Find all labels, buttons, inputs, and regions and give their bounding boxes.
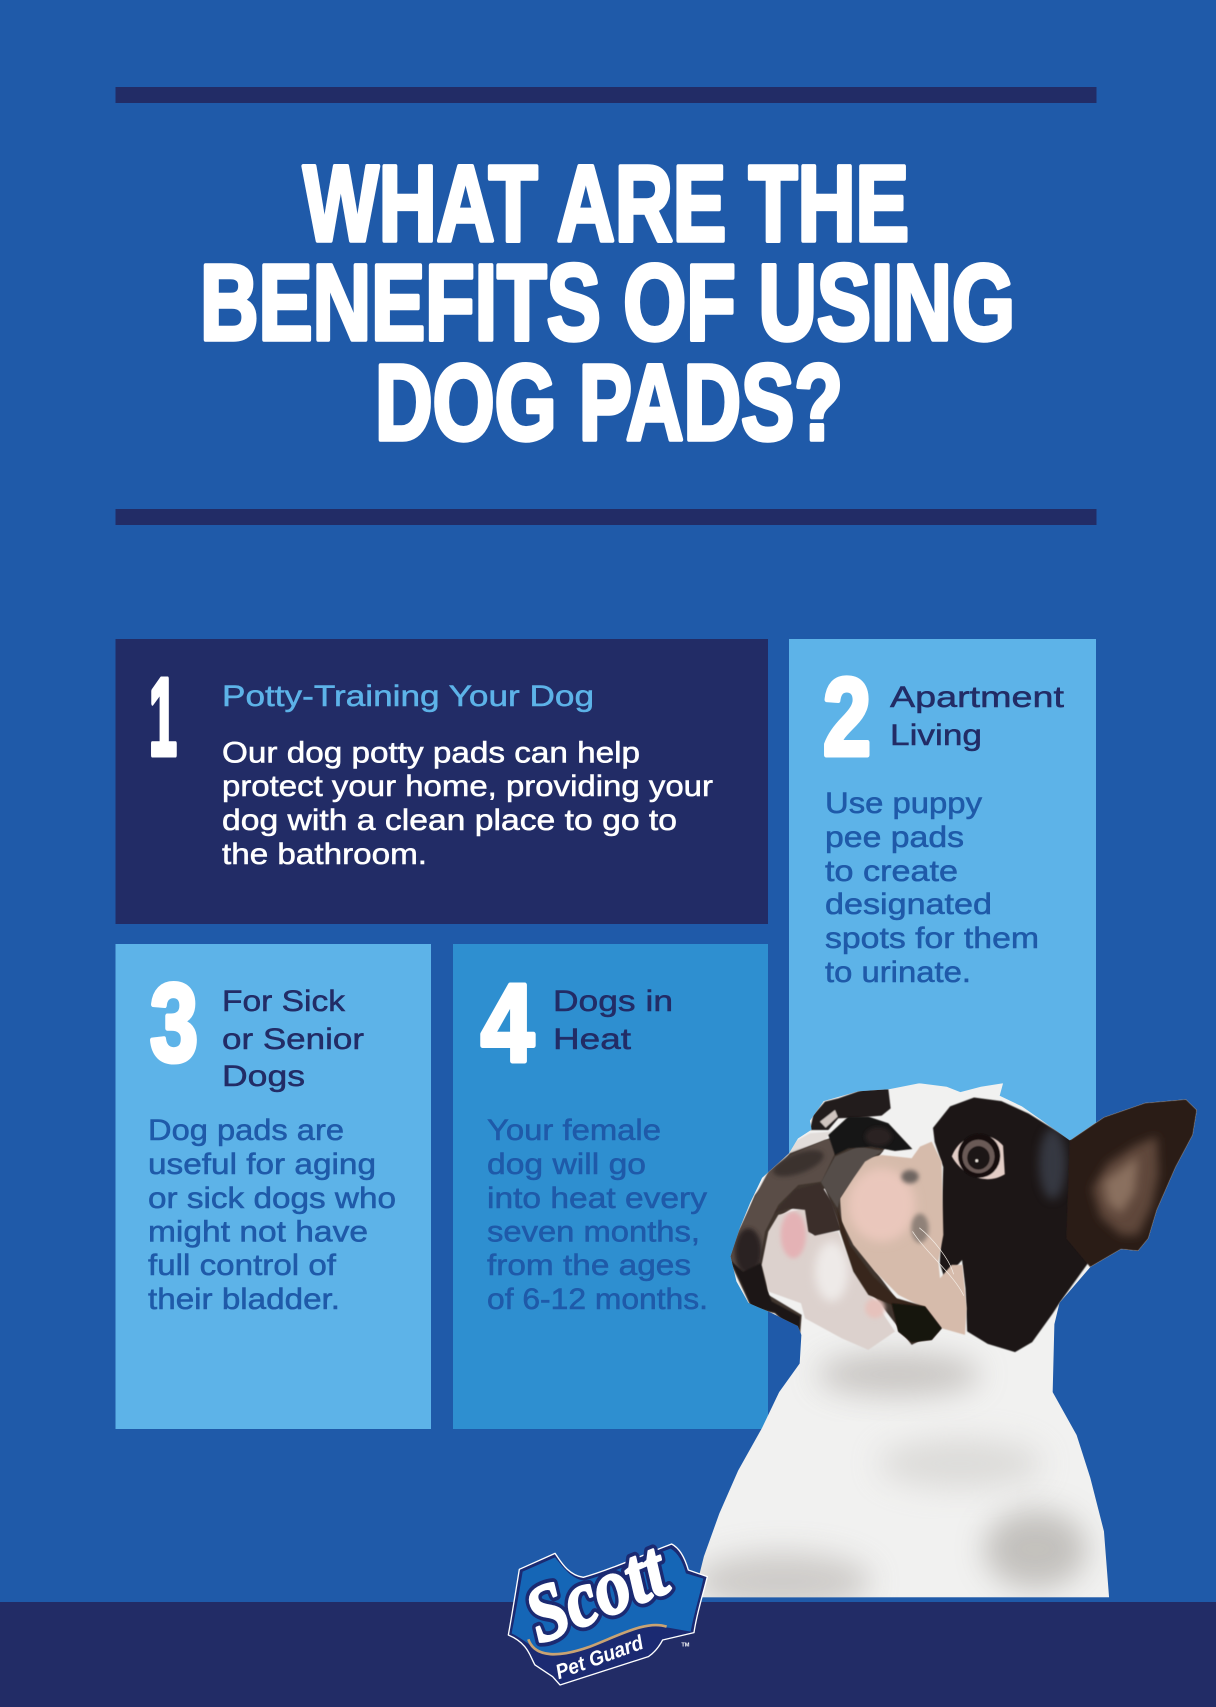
dark underlay of muzzle <box>730 1138 920 1346</box>
logo gold swoosh <box>528 1625 667 1654</box>
body 3: Dog pads are <box>148 1114 344 1147</box>
heading 3: or Senior <box>222 1023 364 1056</box>
top rule <box>116 87 1096 103</box>
title <box>200 142 1015 462</box>
body 2: to create <box>825 855 958 888</box>
pale brow <box>788 1132 832 1154</box>
mouth band <box>837 1207 942 1342</box>
whiskers <box>912 1228 964 1296</box>
heading 2 <box>890 681 1065 752</box>
logo outline <box>508 1544 707 1685</box>
body 3: useful for aging <box>148 1148 376 1181</box>
body 3: might not have <box>148 1216 368 1248</box>
inner dark mouth <box>790 1188 840 1236</box>
body 2: Use puppy <box>825 787 982 820</box>
body 4 <box>487 1114 708 1316</box>
heading 3 <box>222 985 364 1093</box>
scott wordmark fill weight: Scott <box>513 1524 681 1661</box>
body 2: spots for them <box>825 922 1039 955</box>
panel 4: dogs in heat <box>453 944 768 1429</box>
body 4: dog will go <box>487 1148 646 1181</box>
body 2: to urinate. <box>825 956 971 989</box>
face detail, drawn in face coordinates <box>728 1089 967 1350</box>
heading 4 <box>553 985 673 1056</box>
eye <box>952 1134 1005 1179</box>
chin <box>762 1208 895 1350</box>
brow patch <box>810 1089 891 1130</box>
body 1 <box>222 736 713 871</box>
muzzle top <box>821 1147 883 1208</box>
body 3: or sick dogs who <box>148 1182 396 1215</box>
heading 3: For Sick <box>222 985 346 1018</box>
footer band <box>0 1602 1216 1707</box>
nose <box>828 1117 912 1155</box>
body 4: from the ages <box>487 1249 691 1282</box>
heading 1: Potty-Training Your Dog <box>222 680 594 713</box>
body 1: the bathroom. <box>222 838 427 871</box>
title: DOG PADS? <box>375 342 843 462</box>
body 3 <box>148 1114 396 1316</box>
panel 1: potty-training: 1 <box>149 656 177 779</box>
body 3: their bladder. <box>148 1283 340 1316</box>
number 4: 4 <box>481 962 534 1085</box>
number 3: 3 <box>150 962 198 1085</box>
lower lip <box>892 1303 942 1342</box>
heading 4: Dogs in <box>553 985 673 1018</box>
french bulldog illustration <box>700 1083 1197 1598</box>
bottom rule <box>116 509 1096 525</box>
heading 3: Dogs <box>222 1060 305 1093</box>
pet guard wordmark: Pet Guard <box>553 1631 647 1684</box>
body 4: into heat every <box>487 1182 707 1215</box>
number 2: 2 <box>823 656 871 779</box>
upper flew <box>730 1139 834 1268</box>
panel 3: sick or senior dogs <box>116 944 431 1429</box>
body 1: protect your home, providing your <box>222 770 713 803</box>
body 2 <box>825 787 1039 989</box>
body 2: pee pads <box>825 821 964 854</box>
logo: Scott Pet Guard <box>508 1524 707 1685</box>
trademark: TM <box>681 1643 690 1649</box>
body 2: designated <box>825 888 992 921</box>
heading 4: Heat <box>553 1023 632 1056</box>
black face patch <box>933 1097 1090 1352</box>
body 1: dog with a clean place to go to <box>222 804 677 837</box>
body 1: Our dog potty pads can help <box>222 736 640 770</box>
dog body <box>700 1083 1197 1598</box>
heading 2: Apartment <box>890 681 1065 714</box>
title: WHAT ARE THE <box>303 142 909 264</box>
body 4: Your female <box>487 1114 661 1147</box>
panel 1: potty-training <box>116 639 768 924</box>
lower-left lip corner <box>731 1262 800 1335</box>
logo flag blue <box>512 1549 703 1655</box>
ear <box>1066 1099 1197 1267</box>
beige muzzle <box>840 1142 967 1335</box>
heading 2: Living <box>890 719 982 752</box>
body 4: of 6-12 months. <box>487 1283 708 1316</box>
scott wordmark: Scott <box>513 1524 681 1661</box>
panel 2: apartment living <box>789 639 1096 1159</box>
body 4: seven months, <box>487 1216 700 1248</box>
body 3: full control of <box>148 1249 337 1282</box>
